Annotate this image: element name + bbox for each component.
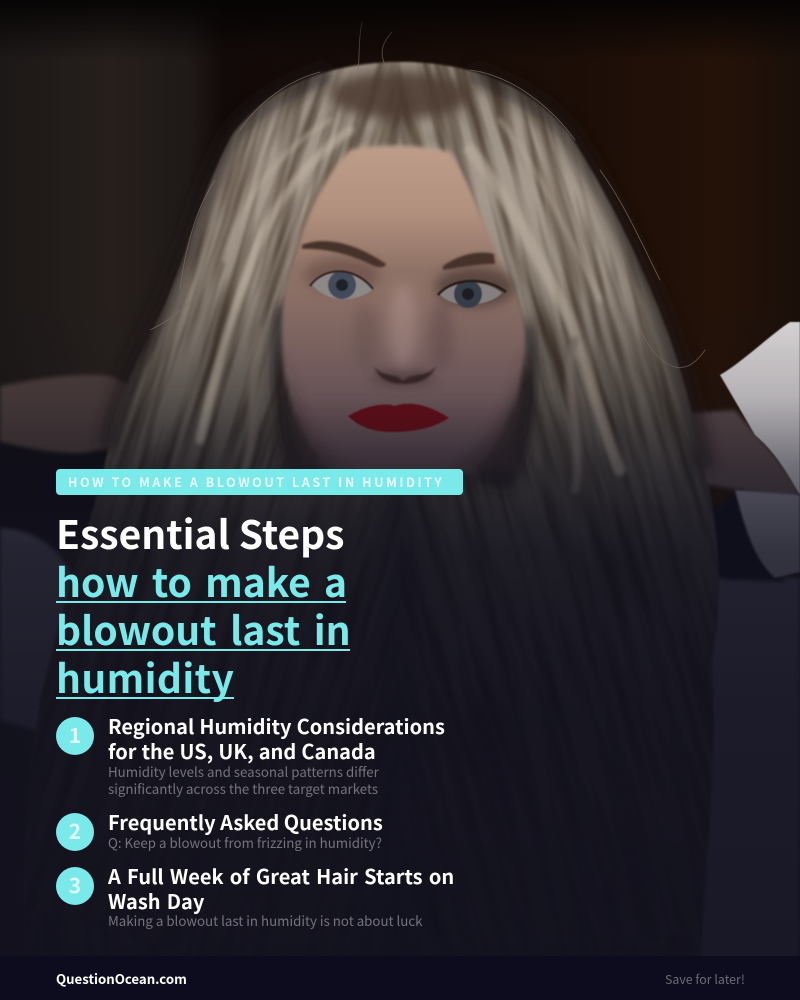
lips xyxy=(348,404,449,432)
step 2 xyxy=(56,807,383,852)
number 1: 1 xyxy=(69,720,81,750)
save note: Save for later! xyxy=(665,970,745,988)
badge text: HOW TO MAKE A BLOWOUT LAST IN HUMIDITY xyxy=(68,472,444,491)
footer bar xyxy=(0,956,800,1000)
number 2: 2 xyxy=(69,816,81,846)
step 3 heading: A Full Week of Great Hair Starts on xyxy=(108,861,454,890)
right eye xyxy=(438,280,506,308)
dark gradient overlay xyxy=(0,300,800,1000)
facial shading xyxy=(283,257,526,472)
dark hair shadows beside the face xyxy=(272,300,537,490)
right hair xyxy=(400,61,710,582)
step 3 text: Making a blowout last in humidity is not about luck xyxy=(108,911,422,930)
step 3 heading xyxy=(108,861,454,915)
left hair xyxy=(118,61,400,582)
top shade xyxy=(0,0,800,60)
arms and clothing xyxy=(0,322,800,1000)
site name: QuestionOcean.com xyxy=(56,969,187,988)
step 1 heading: for the US, UK, and Canada xyxy=(108,736,376,765)
nose xyxy=(374,366,436,384)
number 2 xyxy=(56,813,94,851)
centre seam shadow xyxy=(380,470,420,1000)
step 2 heading: Frequently Asked Questions xyxy=(108,807,383,836)
number 3 xyxy=(56,867,94,905)
title: how to make a xyxy=(56,553,347,609)
step 3 heading: Wash Day xyxy=(108,886,204,915)
step 1 heading: Regional Humidity Considerations xyxy=(108,711,445,740)
hair roots at the parting xyxy=(330,71,470,150)
number 3: 3 xyxy=(69,870,81,900)
title: Essential Steps xyxy=(56,505,344,561)
step 1 heading xyxy=(108,711,445,765)
soft dark hair edges xyxy=(108,72,705,470)
step 1 xyxy=(56,711,445,798)
category badge xyxy=(56,469,463,495)
eyebrows xyxy=(302,241,495,270)
face xyxy=(283,146,526,472)
hair highlights and flyaways xyxy=(150,22,705,490)
title: blowout last in xyxy=(56,601,351,657)
number 1 xyxy=(56,717,94,755)
step 1 text: significantly across the three target markets xyxy=(108,779,378,798)
hair mass xyxy=(38,60,718,940)
title: humidity xyxy=(56,649,234,705)
step 1 text: Humidity levels and seasonal patterns differ xyxy=(108,762,379,781)
step 3 xyxy=(56,861,454,930)
title xyxy=(56,505,351,705)
step 2 text: Q: Keep a blowout from frizzing in humidity? xyxy=(108,833,382,852)
left eye xyxy=(310,271,373,299)
step 1 text xyxy=(108,762,379,798)
